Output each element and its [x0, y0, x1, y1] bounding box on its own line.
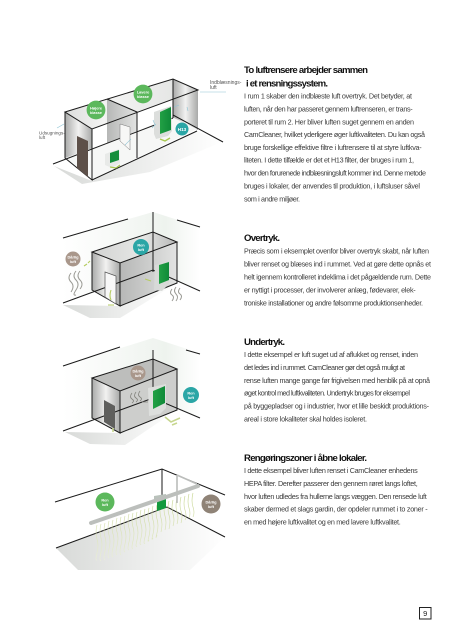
body: som i andre miljøer. — [244, 194, 300, 204]
body: troniske installationer og andre følsomme produktionsenheder. — [244, 298, 423, 308]
body — [244, 350, 430, 424]
circle: dirty air: Dårlig — [132, 368, 144, 374]
air tube — [91, 486, 198, 523]
box walls — [92, 232, 177, 306]
background haze — [63, 338, 200, 431]
heading: i et rensningssystem. — [246, 78, 328, 90]
circle: clean air — [96, 492, 114, 512]
background haze — [63, 212, 200, 303]
body: luften, når den har passeret gennem luftrenseren, er trans- — [244, 104, 413, 114]
circle: dirty air — [66, 252, 80, 266]
text block: underpressure — [244, 337, 430, 424]
heading: Undertryk. — [244, 337, 285, 348]
circle: dirty air — [202, 494, 220, 514]
room walls — [65, 79, 198, 180]
door — [105, 272, 116, 304]
text block: cleaning zones — [244, 453, 428, 526]
body: hvor luften udledes fra hullerne langs væggen. Den rensede luft — [244, 492, 427, 501]
circle: clean air: Ren — [187, 390, 195, 396]
body: I dette eksempel bliver luften renset i CamCleaner enhedens — [244, 466, 418, 475]
bracket — [177, 475, 197, 503]
body: skaber dermed et slags gardin, der opdeler rummet i to zoner - — [244, 504, 428, 514]
body — [244, 466, 428, 526]
circle: dirty air: Dårlig — [67, 254, 79, 260]
page number: 9 — [423, 609, 427, 618]
circle: lower class — [134, 85, 152, 103]
text block: two air cleaners — [244, 65, 426, 204]
small air cleaner — [105, 149, 120, 168]
body: øget kontrol med luftkvaliteten. Undertryk bruges for eksempel — [244, 389, 410, 398]
circle: dirty air: luft — [135, 373, 142, 378]
body: bruge forskellige effektive filtre i luftrensere til at styre luftkva- — [244, 143, 422, 152]
air cleaner — [154, 494, 166, 511]
airflow arrows — [57, 92, 226, 145]
diagram: underpressure — [63, 338, 200, 445]
room outlines — [53, 79, 223, 180]
diagram: overpressure — [63, 212, 200, 318]
circle: higher class — [87, 101, 105, 119]
circle: dirty air: Dårlig — [205, 500, 217, 504]
circle: lower class: klasse — [137, 94, 150, 99]
air cleaner — [148, 384, 166, 416]
body: I dette eksempel er luft suget ud af aflukket og renset, inden — [244, 350, 418, 359]
inner door — [120, 124, 130, 150]
body: en med højere luftkvalitet og en med lavere luftkvalitet. — [244, 518, 401, 526]
outlines — [63, 347, 200, 433]
airflow particles — [84, 261, 151, 305]
body: helt igennem kontrolleret indeklima i det pågældende rum. Dette — [244, 272, 431, 282]
circle: lower class: Lavere — [137, 90, 150, 94]
door — [104, 400, 115, 429]
body: liteten. I dette tilfælde er det et H13 filter, der bruges i rum 1, — [244, 156, 414, 165]
wavy dirty air — [130, 391, 148, 403]
body: bliver renset og blæses ind i rummet. Ved at gøre dette opnås et — [244, 260, 431, 268]
diagram: cleaning zones — [55, 469, 225, 570]
body: er nyttigt i processer, der involverer anlæg, fødevarer, elek- — [244, 286, 416, 294]
heading: To luftrensere arbejder sammen — [244, 65, 368, 76]
floor shadow — [56, 508, 225, 570]
circle: clean air: Ren — [137, 242, 145, 248]
heading — [244, 65, 368, 90]
outlines — [63, 212, 200, 306]
label: extract air: Udsugnings- — [39, 130, 65, 136]
diagram: two connected rooms — [39, 79, 242, 184]
body: porteret til rum 2. Her bliver luften suget gennem en anden — [244, 118, 414, 126]
heading: Rengøringszoner i åbne lokaler. — [244, 453, 367, 464]
body: I rum 1 skaber den indblæste luft overtryk. Det betyder, at — [244, 92, 412, 100]
large air cleaner — [154, 106, 172, 141]
air curtain waves — [96, 493, 194, 561]
floor shadow — [63, 283, 177, 318]
circle: dirty air: luft — [70, 259, 77, 264]
page number — [420, 608, 431, 619]
label: extract air: luft — [39, 135, 46, 140]
door — [77, 136, 88, 177]
body: det ledes ind i rummet. CamCleaner gør det også muligt at — [244, 363, 405, 372]
circle: higher class: Højere — [90, 106, 103, 110]
room lines — [55, 469, 225, 548]
circle: clean air: luft — [138, 247, 145, 252]
body: hvor den forurenede indblæsningsluft kommer ind. Denne metode — [244, 169, 426, 178]
body: CamCleaner, hvilket yderligere øger luftkvaliteten. Du kan også — [244, 130, 425, 139]
circle: clean air: luft — [102, 502, 109, 507]
circle: clean air — [183, 387, 199, 403]
circle: higher class: klasse — [90, 110, 103, 115]
body — [244, 92, 426, 204]
body: Præcis som i eksemplet ovenfor bliver overtryk skabt, når luften — [244, 246, 429, 256]
circle: clean air — [133, 239, 149, 255]
body: areal i store lokaliteter skal holdes isoleret. — [244, 414, 367, 424]
label: supply air: Indblæsnings- — [210, 80, 241, 86]
circle: clean air: Ren — [101, 498, 109, 502]
body — [244, 246, 431, 308]
body: HEPA filter. Derefter passerer den gennem røret langs loftet, — [244, 479, 418, 488]
body: bruges i lokaler, der anvendes til produktion, i luftsluser såvel — [244, 182, 420, 190]
box walls — [92, 359, 177, 433]
circle: clean air: luft — [188, 395, 195, 400]
floor shadow — [65, 410, 177, 445]
wavy dirty air left — [69, 271, 82, 295]
circle: H13: H13 — [178, 127, 187, 132]
label: supply air: luft — [210, 85, 217, 91]
heading: Overtryk. — [244, 233, 280, 244]
text block: overpressure — [244, 233, 431, 308]
wavy dirty air right — [170, 287, 182, 301]
circle: H13 — [176, 122, 188, 136]
clean air particles — [113, 417, 180, 432]
circle: dirty air — [130, 366, 146, 380]
body: rense luften mange gange før frigivelsen med henblik på at opnå — [244, 376, 430, 385]
air cleaner — [154, 261, 169, 291]
floor shadow — [54, 131, 222, 184]
body: på byggepladser og i industrier, hvor et lille beskidt produktions- — [244, 402, 430, 410]
circle: dirty air: luft — [208, 504, 215, 509]
